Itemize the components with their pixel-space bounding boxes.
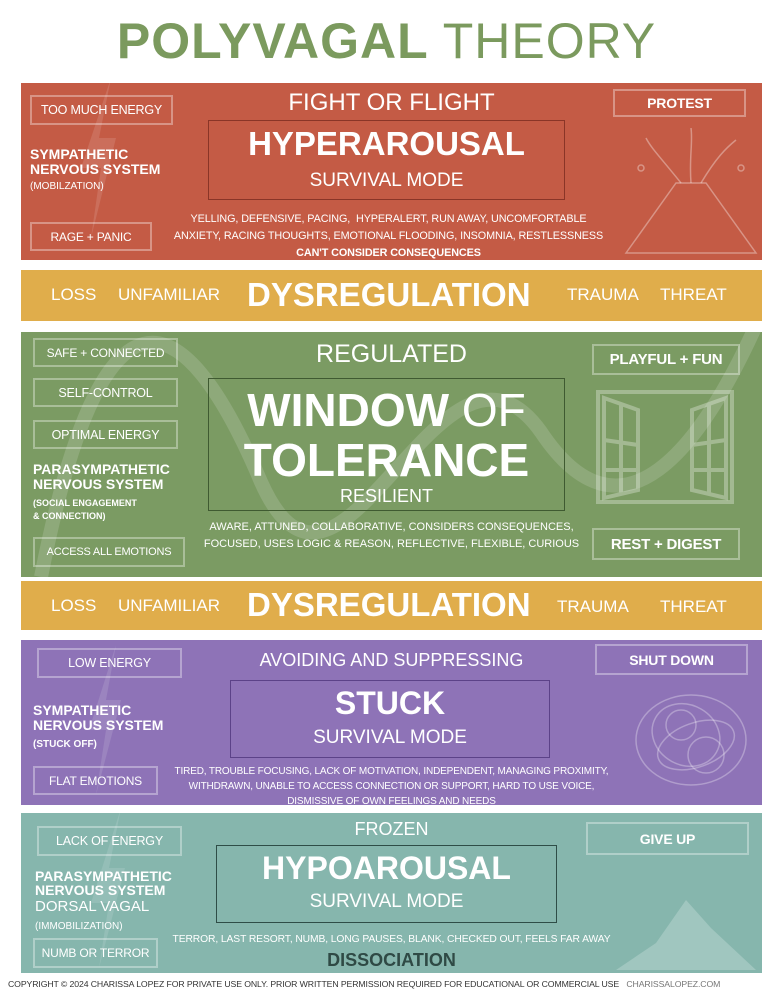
box: hyperarousal title: SURVIVAL MODE [310,170,463,191]
text: parasympathetic dorsal vagal: PARASYMPATHETIC [35,868,172,884]
band: dysregulation 2: THREAT [660,597,727,616]
box: shut down: SHUT DOWN [629,652,714,668]
band: dysregulation 2: UNFAMILIAR [118,596,220,615]
box: window of tolerance [208,378,565,511]
band: dysregulation 2: DYSREGULATION [247,586,531,623]
icon: lightning [91,813,125,965]
box: protest [613,89,746,117]
heading: avoiding and suppressing: AVOIDING AND SUPPRESSING [260,650,523,670]
icon: volcano [624,128,758,254]
heading: regulated: REGULATED [316,340,467,368]
box: access all emotions [33,537,185,567]
band: dysregulation 1: TRAUMA [567,285,639,304]
box: low energy: LOW ENERGY [68,656,151,670]
text: sympathetic stuck off [33,702,163,750]
box: hyperarousal title [208,120,565,200]
text: sympathetic stuck off: (STUCK OFF) [33,739,97,750]
band: dysregulation 1: THREAT [660,285,727,304]
text: parasympathetic: (SOCIAL ENGAGEMENT [33,498,137,508]
text: hypoarousal traits: TERROR, LAST RESORT, NUMB, LONG PAUSES, BLANK, CHECKED OUT, FEELS FAR AWAY [173,934,610,945]
icon: lightning [90,648,121,792]
panel: hypoarousal [21,813,762,973]
text: symptoms: CAN'T CONSIDER CONSEQUENCES [296,247,481,259]
text: parasympathetic dorsal vagal: (IMMOBILIZATION) [35,921,123,932]
text: stuck traits [174,766,608,807]
band: dysregulation 1 [21,270,762,321]
icon: tangle [635,694,747,786]
text: sympathetic [30,146,160,192]
box: give up: GIVE UP [640,830,695,846]
band: dysregulation 2: TRAUMA [557,597,629,616]
box: numb or terror: NUMB OR TERROR [42,946,149,960]
text: sympathetic stuck off: SYMPATHETIC [33,702,131,718]
band: dysregulation 2 [21,581,762,630]
text: parasympathetic: & CONNECTION) [33,511,106,521]
text: symptoms [174,213,603,259]
text: stuck traits: WITHDRAWN, UNABLE TO ACCESS CONNECTION OR SUPPORT, HARD TO USE VOICE, [189,781,594,792]
text: parasympathetic [33,461,170,521]
box: hypoarousal title: SURVIVAL MODE [310,891,463,912]
band: dysregulation 1: LOSS [51,285,96,304]
heading: fight or flight: FIGHT OR FLIGHT [288,89,495,116]
box: give up [586,822,749,855]
box: rage + panic: RAGE + PANIC [50,230,132,244]
text: sympathetic: NERVOUS SYSTEM [30,161,160,177]
band: dysregulation 1: DYSREGULATION [247,276,531,313]
box: low energy [37,648,182,678]
box: lack of energy: LACK OF ENERGY [56,834,163,848]
icon: lightning [82,83,116,235]
box: hypoarousal title [216,845,557,923]
box: optimal energy [33,420,178,449]
text: symptoms: YELLING, DEFENSIVE, PACING, HYPERALERT, RUN AWAY, UNCOMFORTABLE [190,213,586,225]
decorative wave [34,332,760,577]
label: dissociation: DISSOCIATION [327,950,456,970]
text: parasympathetic dorsal vagal [35,868,172,932]
box: playful + fun: PLAYFUL + FUN [610,351,722,368]
title: POLYVAGAL THEORY [117,13,656,69]
text: parasympathetic dorsal vagal: DORSAL VAGAL [35,898,149,915]
box: stuck title: SURVIVAL MODE [313,727,467,748]
box: rest + digest: REST + DIGEST [611,536,721,552]
box: shut down [595,644,748,675]
icon: iceberg [616,900,756,970]
box: safe + connected: SAFE + CONNECTED [47,346,164,360]
box: flat emotions: FLAT EMOTIONS [49,774,142,788]
panel: stuck [21,640,762,805]
box: access all emotions: ACCESS ALL EMOTIONS [47,546,171,558]
box: self-control [33,378,178,407]
band: dysregulation 2: LOSS [51,596,96,615]
heading: frozen: FROZEN [354,819,428,839]
box: window of tolerance: RESILIENT [340,486,433,506]
panel: hyperarousal [21,83,762,260]
panel: window of tolerance [21,332,762,577]
text: stuck traits: DISMISSIVE OF OWN FEELINGS AND NEEDS [287,796,496,807]
text: traits [204,521,579,550]
box: lack of energy [37,826,182,856]
icon: window [596,390,734,504]
box: stuck title [230,680,550,758]
box: self-control: SELF-CONTROL [58,386,153,400]
band: dysregulation 1: UNFAMILIAR [118,285,220,304]
box: protest: PROTEST [647,95,712,111]
text: sympathetic stuck off: NERVOUS SYSTEM [33,717,163,733]
box: rest + digest [592,528,740,560]
box: hypoarousal title: HYPOAROUSAL [262,850,511,886]
text: traits: AWARE, ATTUNED, COLLABORATIVE, CONSIDERS CONSEQUENCES, [209,521,574,533]
text: parasympathetic dorsal vagal: NERVOUS SYSTEM [35,882,165,898]
box: stuck title: STUCK [335,685,445,721]
text: parasympathetic: NERVOUS SYSTEM [33,476,163,492]
box: hyperarousal title: HYPERAROUSAL [248,125,525,162]
box: safe + connected [33,338,178,367]
text: parasympathetic: PARASYMPATHETIC [33,461,170,477]
box: window of tolerance: TOLERANCE [244,434,529,486]
box: rage + panic [30,222,152,251]
footer: COPYRIGHT © 2024 CHARISSA LOPEZ FOR PRIVATE USE ONLY. PRIOR WRITTEN PERMISSION REQUIRED FOR EDUCATIONAL OR COMMERCIAL USE CHARISSALOPEZ.COM [8,979,720,989]
box: too much energy [30,95,173,125]
box: numb or terror [33,938,158,968]
box: window of tolerance: WINDOW OF [247,384,526,436]
text: traits: FOCUSED, USES LOGIC & REASON, REFLECTIVE, FLEXIBLE, CURIOUS [204,538,579,550]
text: sympathetic: (MOBILZATION) [30,181,104,192]
text: stuck traits: TIRED, TROUBLE FOCUSING, LACK OF MOTIVATION, INDEPENDENT, MANAGING PROXIMITY, [175,766,608,777]
box: optimal energy: OPTIMAL ENERGY [52,428,159,442]
text: sympathetic: SYMPATHETIC [30,146,128,162]
box: flat emotions [33,766,158,795]
text: symptoms: ANXIETY, RACING THOUGHTS, EMOTIONAL FLOODING, INSOMNIA, RESTLESSNESS [174,230,603,242]
box: too much energy: TOO MUCH ENERGY [41,103,162,117]
box: playful + fun [592,344,740,375]
